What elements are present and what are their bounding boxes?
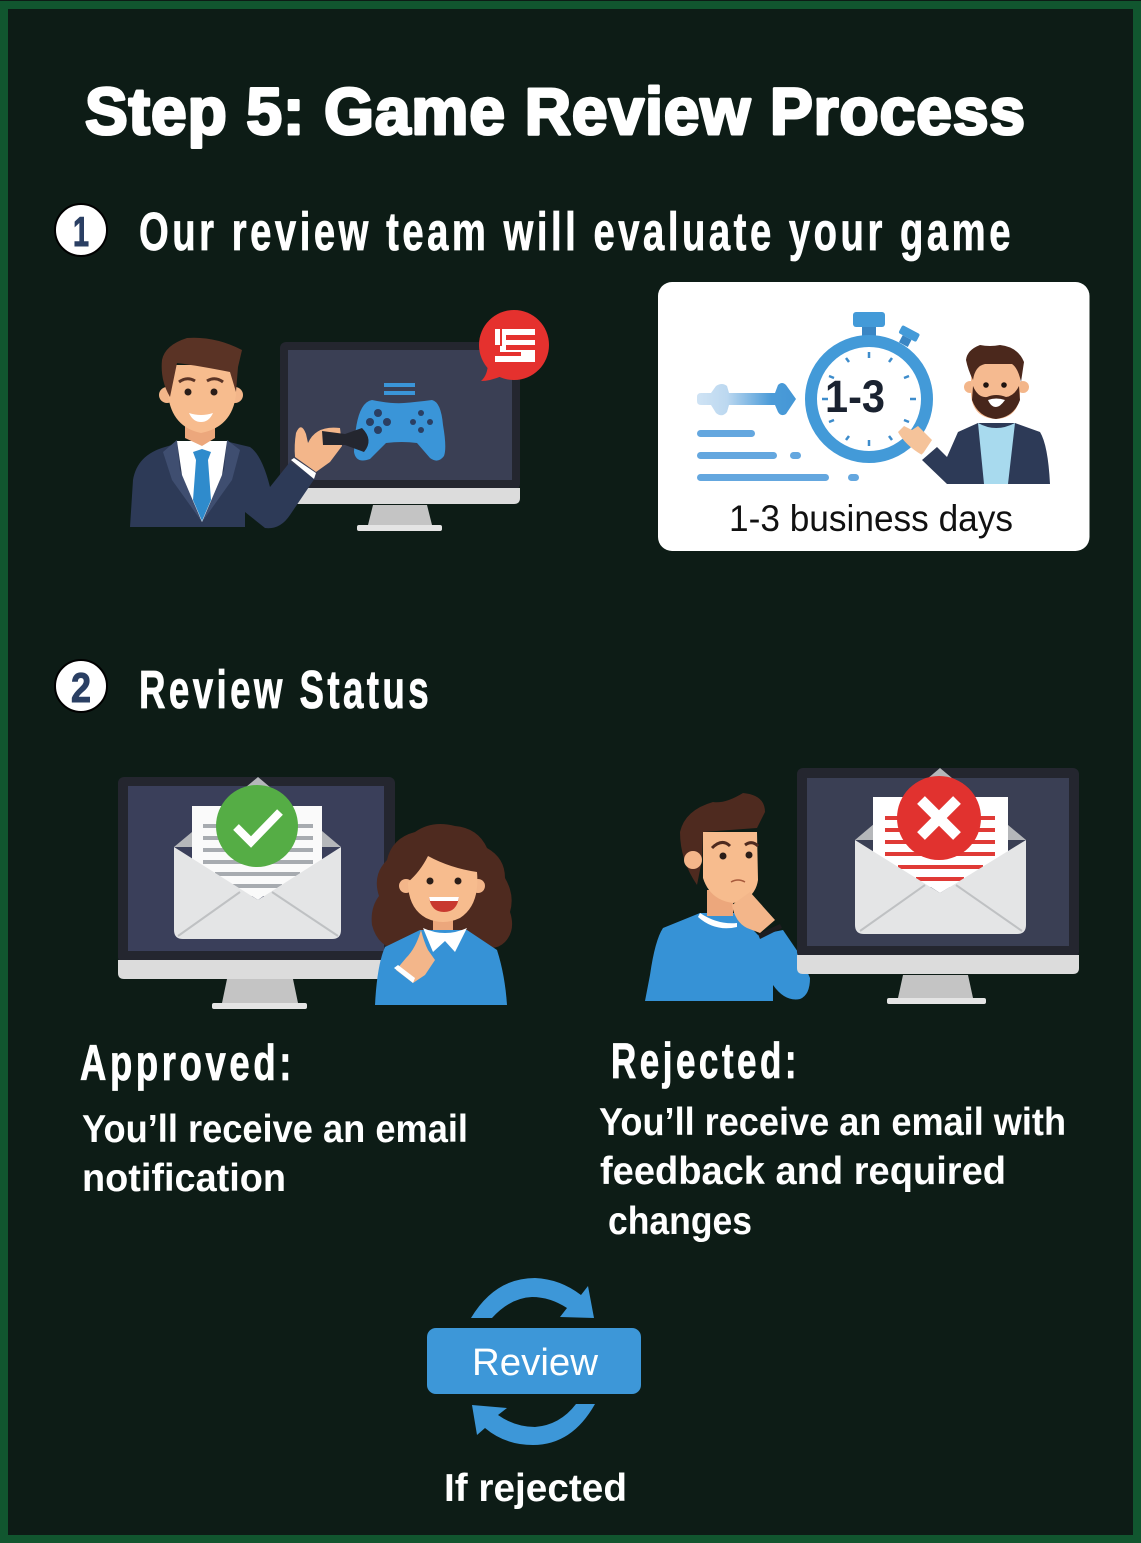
approved description: notification: [82, 1157, 286, 1200]
review button: [427, 1328, 641, 1394]
approved description: You’ll receive an email: [82, 1108, 468, 1151]
rejected description: changes: [608, 1200, 752, 1243]
illustration: rejected email: [645, 768, 1079, 1004]
number badge 1: [55, 204, 107, 256]
status heading: approved: Approved:: [80, 1035, 295, 1091]
card: 1-3 business days: [658, 282, 1090, 551]
happy woman character: [372, 824, 512, 1005]
monitor: [280, 342, 520, 531]
speed lines: [697, 430, 859, 481]
caption: 1-3 business days: [729, 498, 1013, 539]
rejected description: You’ll receive an email with: [599, 1101, 1066, 1144]
caption: if rejected: If rejected: [444, 1467, 627, 1510]
status heading: rejected: Rejected:: [611, 1033, 800, 1089]
rejected description: feedback and required: [600, 1150, 1006, 1193]
heading: review status: Review Status: [139, 660, 432, 720]
arrow: bottom loop: [472, 1404, 595, 1445]
review button: Review: [472, 1342, 599, 1384]
rejected description: [599, 1101, 1066, 1243]
number badge 2: 2: [71, 664, 91, 711]
thinking man character: [645, 793, 810, 1001]
title: Step 5: Game Review Process: [85, 74, 1026, 148]
illustration: approved email: [118, 777, 512, 1009]
reviewer character: [130, 338, 369, 528]
icon: speed arrow: [697, 383, 796, 415]
review loop: [427, 1278, 641, 1445]
icon: green check badge: [216, 785, 298, 867]
icon: envelope with document: [174, 777, 341, 939]
icon: stopwatch: [811, 312, 927, 457]
number badge 2: [55, 660, 107, 712]
icon: stopwatch: 1-3: [825, 371, 885, 422]
arrow: top loop: [471, 1278, 594, 1318]
approved description: [82, 1108, 468, 1200]
icon: envelope with marked document: [855, 768, 1026, 934]
bearded man character: [898, 345, 1050, 484]
icon: red cross badge: [897, 776, 981, 860]
icon: red notification bubble: [479, 310, 549, 381]
monitor: [118, 777, 395, 1009]
number badge 1: 1: [73, 208, 89, 255]
illustration: reviewer at monitor with game controller: [130, 310, 549, 531]
monitor: [797, 768, 1079, 1004]
icon: game controller: [354, 383, 445, 461]
